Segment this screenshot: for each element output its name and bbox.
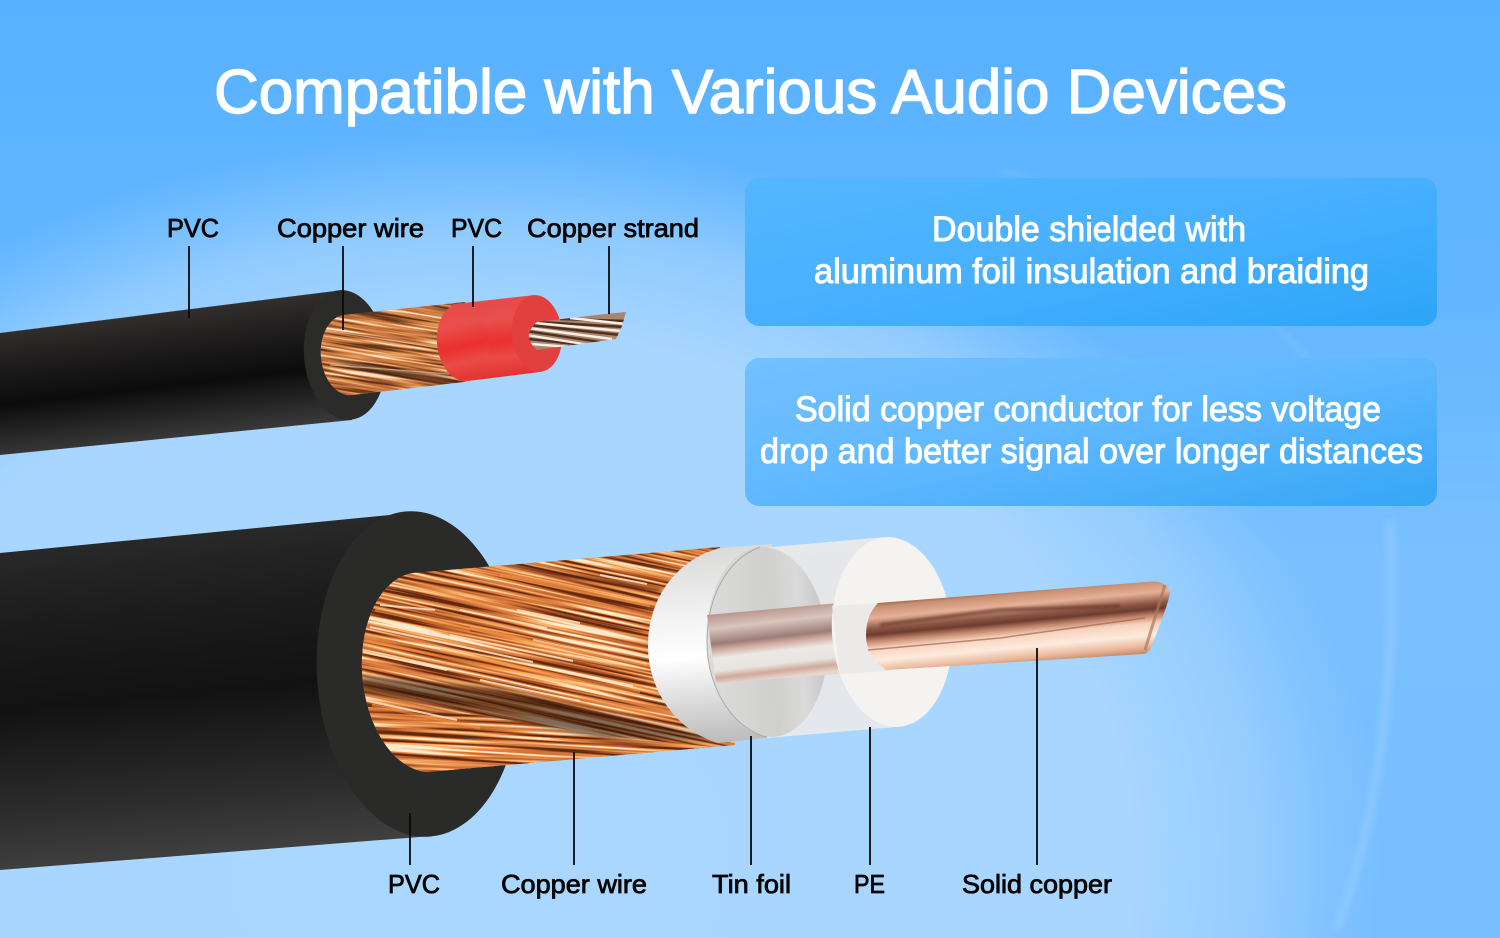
small cable red insulation [434,293,565,383]
PE insulation band [760,537,896,738]
foil face rim [707,547,767,737]
large cable jacket end face [306,504,530,844]
large cable black jacket [0,513,432,870]
label: Tin foil: Tin foil [712,869,791,899]
small cable copper strand [529,312,626,350]
PE end face [826,533,958,731]
large cable copper braid [362,547,735,772]
tin foil wrap [648,544,775,743]
tin foil end face [701,543,833,741]
small cable cross-section [0,290,626,455]
solid copper rod [866,581,1170,670]
label: PVC top middle: PVC [451,213,502,243]
label: PVC bottom: PVC [388,869,440,899]
small cable copper braid [320,302,472,396]
small cable black jacket [0,290,352,455]
small cable jacket end face [298,287,392,423]
copper core seen through PE [707,601,868,683]
panel 1 text line 1: Double shielded with [932,210,1246,249]
large cable cross-section [0,511,1170,870]
panel: double shielded [745,178,1437,326]
callout lines [189,246,1037,865]
title: Compatible with Various Audio Devices [214,58,1287,127]
label: Copper strand: Copper strand [527,213,699,243]
panel: solid copper conductor [745,358,1437,506]
panel 1 text line 2: aluminum foil insulation and braiding [814,252,1369,291]
panel 2 text line 1: Solid copper conductor for less voltage [795,390,1381,429]
label: Copper wire bottom: Copper wire [501,869,647,899]
label: Copper wire top: Copper wire [277,213,424,243]
label: PVC top left: PVC [167,213,219,243]
label: PE: PE [854,869,885,899]
panel 2 text line 2: drop and better signal over longer distances [760,432,1423,471]
label: Solid copper: Solid copper [962,869,1112,899]
core inside PE end [832,603,888,674]
